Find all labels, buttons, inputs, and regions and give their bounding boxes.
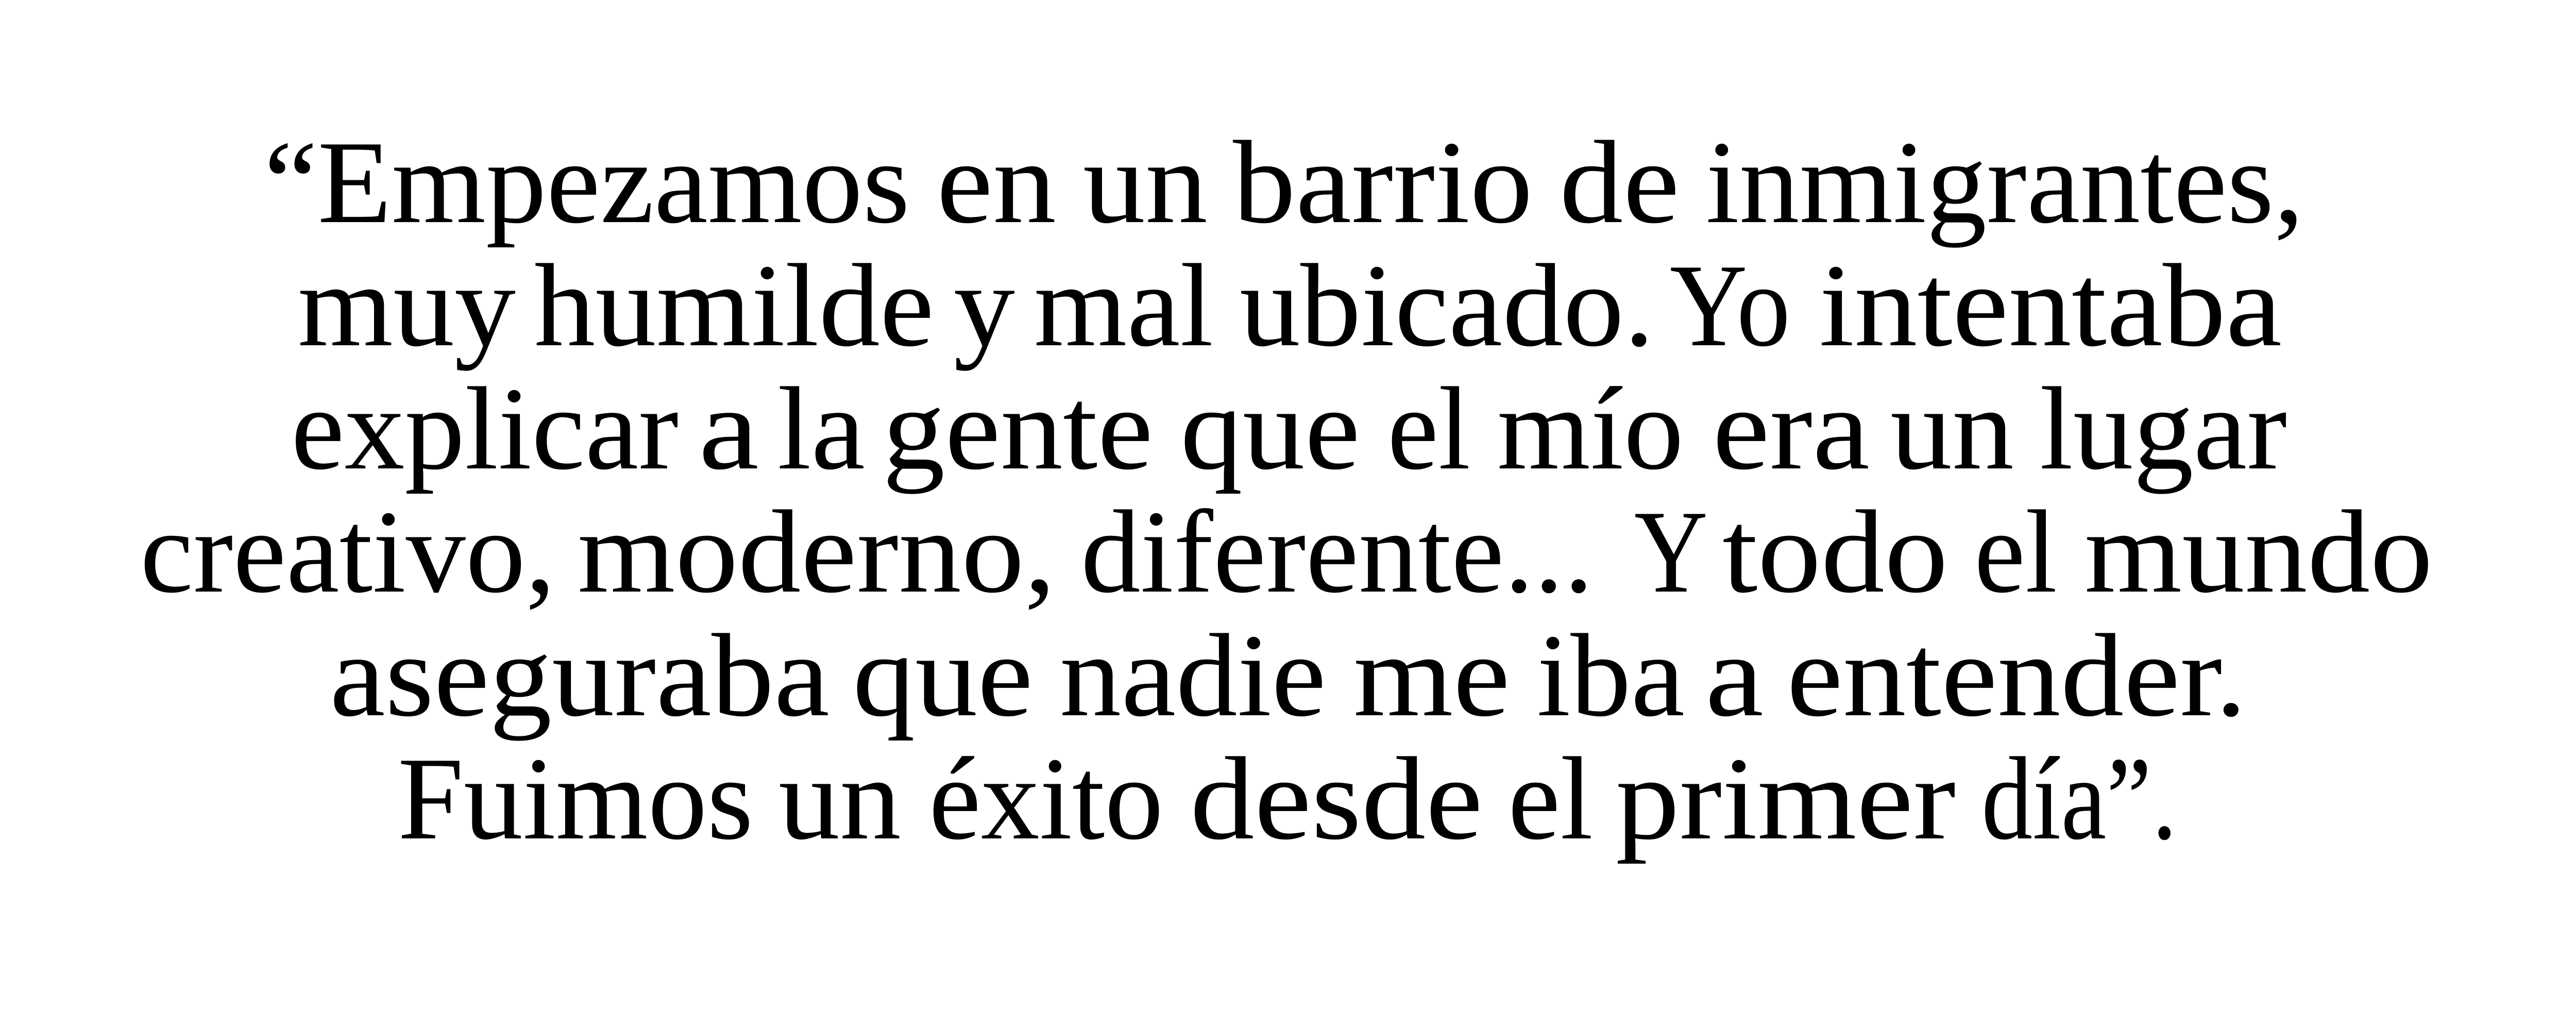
quote line 4: diferente... bbox=[1081, 486, 1594, 617]
quote line 6: Fuimos bbox=[398, 733, 753, 864]
quote line 1: “Empezamos bbox=[264, 116, 910, 248]
quote line 3: explicar bbox=[291, 363, 679, 494]
quote line 2: intentaba bbox=[1819, 240, 2282, 371]
quote line 3: la bbox=[777, 363, 865, 494]
quote text block bbox=[140, 116, 2433, 864]
quote line 2: ubicado. bbox=[1240, 240, 1654, 371]
quote line 6: un bbox=[778, 733, 901, 864]
quote line 4: moderno, bbox=[578, 486, 1056, 617]
quote line 4: el bbox=[1974, 486, 2057, 617]
quote line 3: lugar bbox=[2040, 363, 2287, 494]
quote line 2: Yo bbox=[1670, 240, 1790, 371]
quote line 1: de bbox=[1560, 116, 1680, 248]
quote line 6: el bbox=[1508, 733, 1593, 864]
quote line 4: Y bbox=[1634, 486, 1708, 617]
quote line 1: un bbox=[1083, 116, 1208, 248]
quote line 5: que bbox=[853, 610, 1033, 741]
quote line 6: éxito bbox=[929, 733, 1163, 864]
quote line 3: mío bbox=[1497, 363, 1684, 494]
quote line 6: desde bbox=[1190, 733, 1483, 864]
quote line 1: en bbox=[937, 116, 1056, 248]
quote line 6: día”. bbox=[1981, 733, 2177, 864]
quote line 5: nadie bbox=[1060, 610, 1326, 741]
quote line 4: creativo, bbox=[140, 486, 555, 617]
quote line 2: humilde bbox=[534, 240, 934, 371]
quote line 3: que bbox=[1180, 363, 1360, 494]
quote line 2: muy bbox=[298, 240, 516, 371]
quote line 4: todo bbox=[1722, 486, 1948, 617]
quote line 3: un bbox=[1890, 363, 2014, 494]
quote line 2: y bbox=[954, 240, 1015, 371]
quote line 5: me bbox=[1353, 610, 1510, 741]
quote line 3: gente bbox=[883, 363, 1153, 494]
quote line 5 bbox=[330, 610, 2247, 741]
quote line 5: aseguraba bbox=[330, 610, 829, 741]
quote line 2 bbox=[298, 240, 2282, 371]
quote line 6: primer bbox=[1616, 733, 1956, 864]
quote line 5: entender. bbox=[1787, 610, 2247, 741]
quote line 2: mal bbox=[1034, 240, 1213, 371]
quote line 4: mundo bbox=[2084, 486, 2433, 617]
quote line 5: iba bbox=[1537, 610, 1685, 741]
quote line 3 bbox=[291, 363, 2287, 494]
quote line 5: a bbox=[1705, 610, 1764, 741]
quote line 1 bbox=[264, 116, 2304, 248]
quote line 4 bbox=[140, 486, 2433, 617]
quote line 6 bbox=[398, 733, 2177, 864]
quote line 1: inmigrantes, bbox=[1706, 116, 2304, 248]
quote line 3: era bbox=[1713, 363, 1870, 494]
quote line 1: barrio bbox=[1233, 116, 1533, 248]
quote line 3: el bbox=[1387, 363, 1470, 494]
quote line 3: a bbox=[699, 363, 759, 494]
